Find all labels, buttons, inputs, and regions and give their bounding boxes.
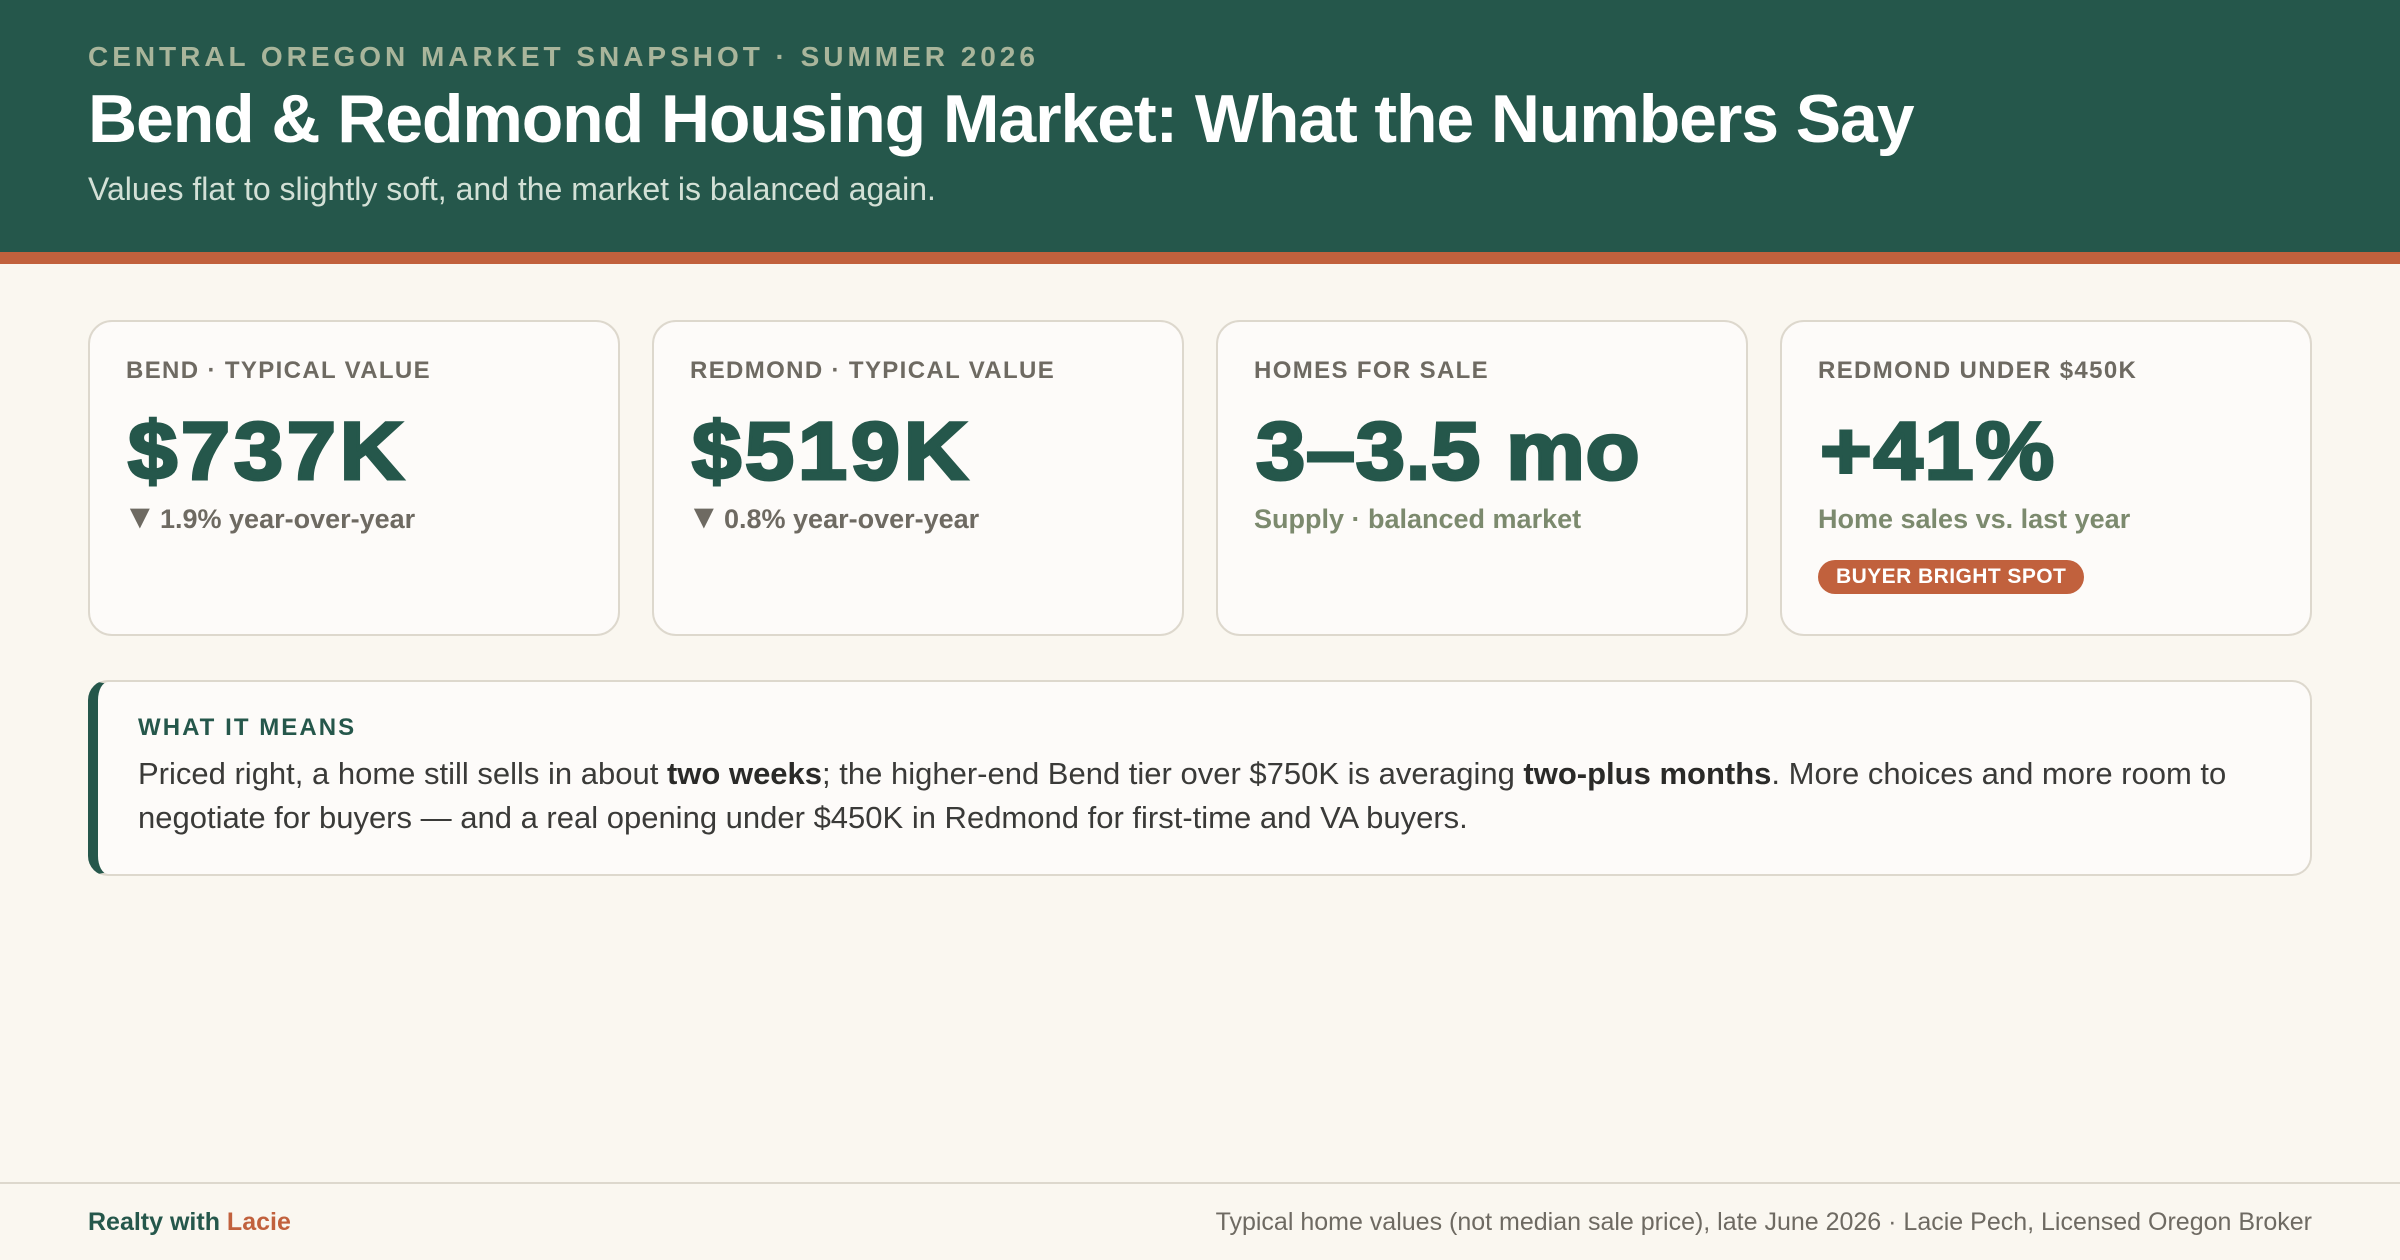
change note	[123, 498, 415, 536]
big number: $519K	[692, 406, 971, 497]
supply note: Supply · balanced market	[1254, 504, 1581, 534]
header band	[0, 0, 2400, 264]
callout text: Priced right, a home still sells in about two weeks; the higher-end Bend tier over $750K is averaging two-plus months. More choices and more room to negotiate for buyers — and a real opening under $450K in Redmond for first-time and VA buyers.	[138, 756, 2226, 835]
card label: REDMOND UNDER $450K	[1818, 357, 2137, 384]
kicker: CENTRAL OREGON MARKET SNAPSHOT · SUMMER 2026	[88, 41, 1039, 72]
card label: BEND · TYPICAL VALUE	[126, 357, 431, 384]
change note	[687, 498, 979, 536]
footer source note: Typical home values (not median sale price), late June 2026 · Lacie Pech, Licensed Oregon Broker	[1216, 1208, 2312, 1236]
panel: homes for sale	[1216, 320, 1748, 636]
panel: Redmond typical value	[652, 320, 1184, 636]
callout heading: WHAT IT MEANS	[138, 714, 356, 741]
change note: ▼	[123, 498, 157, 536]
panel: Bend typical value	[88, 320, 620, 636]
badge: BUYER BRIGHT SPOT	[1836, 565, 2066, 588]
card label: REDMOND · TYPICAL VALUE	[690, 357, 1055, 384]
card label: HOMES FOR SALE	[1254, 357, 1489, 384]
callout: what it means	[88, 680, 2312, 876]
change note: 1.9% year-over-year	[160, 504, 415, 534]
title: Bend & Redmond Housing Market: What the Numbers Say	[88, 81, 1913, 157]
change note: 0.8% year-over-year	[724, 504, 979, 534]
big number: 3–3.5 mo	[1256, 406, 1640, 497]
badge	[1818, 560, 2084, 594]
subtitle: Values flat to slightly soft, and the market is balanced again.	[88, 171, 936, 207]
panel: Redmond under $450K	[1780, 320, 2312, 636]
big number: +41%	[1820, 406, 2056, 497]
footer brand: Realty with Lacie	[88, 1208, 291, 1236]
sales note: Home sales vs. last year	[1818, 504, 2130, 534]
big number: $737K	[128, 406, 407, 497]
change note: ▼	[687, 498, 721, 536]
